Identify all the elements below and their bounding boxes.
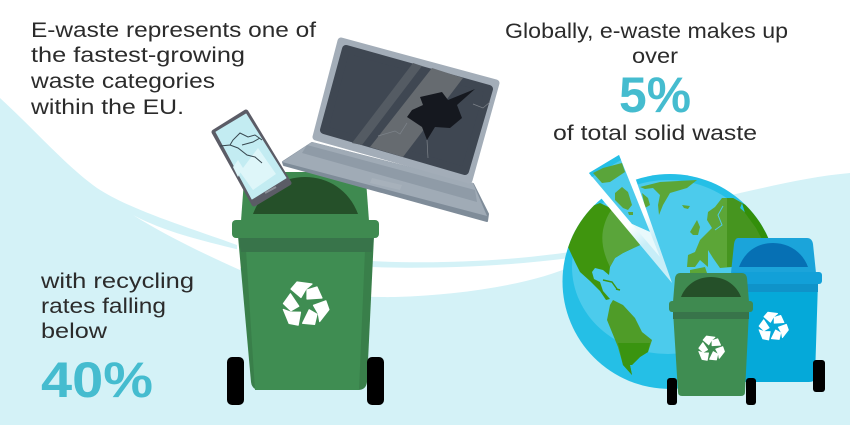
small bin rim [669,301,753,312]
text: recycling rates: rates falling [41,294,166,318]
icon: globe with cut-out slice [562,155,778,389]
phone body [214,112,289,204]
icon: blue bin [731,238,825,392]
text: of total solid waste: of total solid waste [553,121,757,145]
blue bin recycling symbol [755,312,790,344]
blue bin body [735,282,818,382]
wedge slice [589,155,650,232]
land: africa [690,267,707,273]
globe ocean [562,174,778,389]
small bin band [673,311,749,319]
land: south america [607,300,652,375]
land: baltic sea [715,206,723,230]
phone glare [233,148,276,190]
text: e-waste intro: E-waste represents one of [31,18,316,42]
statistic: 5%: 5% [619,67,691,123]
wedge land [593,163,633,215]
laptop lid [316,41,496,180]
recycling symbol [277,282,332,331]
globe light sphere [572,180,732,354]
text: recycling rates: with recycling [40,269,194,293]
land: canada fragment [642,193,650,208]
small bin recycling symbol [695,336,726,364]
land: iceland [682,205,690,209]
land: north america [568,203,640,300]
bin wheels [227,357,244,405]
screen crack hole [407,89,475,140]
text: global share heading: over [632,44,678,68]
bin lid [241,172,369,221]
phone screen [216,114,286,199]
phone speaker [265,187,276,193]
text: e-waste intro [30,18,316,119]
icon: cracked phone [214,112,289,204]
small bin body [673,311,749,396]
blue bin wheel [813,360,825,392]
blue bin rim [731,272,822,284]
blue bin band [736,283,818,292]
text: e-waste intro: the fastest-growing [31,43,245,67]
text: global share heading [505,19,788,68]
phone cracks [220,133,262,163]
land: caribbean [603,280,620,290]
text: recycling rates: below [41,319,108,343]
land: uk [690,220,700,235]
laptop keyboard [302,145,477,202]
text: e-waste intro: within the EU. [30,95,184,119]
screen cracks [378,102,490,158]
bin rim [232,220,379,238]
wedge gap [589,155,672,283]
blue bin lid [731,238,816,273]
land: europe [687,198,745,268]
bin dome opening [253,177,358,214]
text: recycling rates [40,269,194,343]
land: greenland [640,180,697,215]
icon: small green bin [667,273,756,405]
blue bin dome [739,243,808,267]
small bin dome [681,277,741,297]
small bin lid [673,273,749,302]
wedge rim [589,155,621,177]
statistic: 40%: 40% [41,352,153,408]
laptop trackpad [370,178,402,190]
text: e-waste intro: waste categories [30,69,215,93]
background wave: pale blue lower area [0,98,850,425]
screen glare [352,63,422,145]
bin body [238,236,374,390]
text: global share heading: Globally, e-waste makes up [505,19,788,43]
icon: large green bin [227,172,384,405]
icon: broken laptop [282,41,496,221]
laptop base [283,143,488,221]
laptop screen [324,49,489,171]
bin band [238,236,374,252]
small bin wheels [667,378,677,405]
